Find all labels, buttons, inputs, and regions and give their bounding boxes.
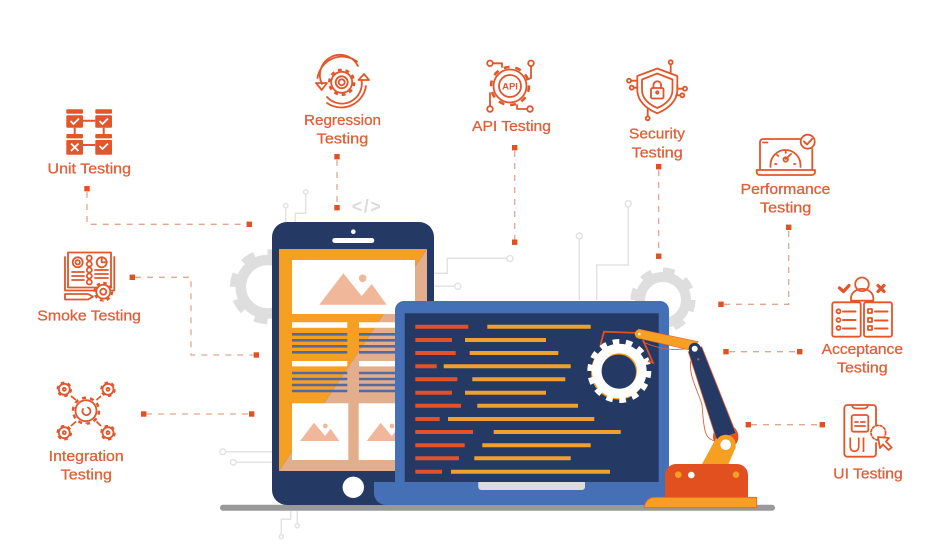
gear: white on laptop screen [590, 342, 648, 400]
code lines: orange [444, 327, 621, 472]
connector: regression testing [334, 154, 340, 210]
phone [272, 222, 434, 505]
icon: unit testing [66, 109, 112, 155]
connector: unit testing [84, 186, 252, 227]
icon: ui testing [844, 405, 892, 457]
gear: right gray [634, 270, 692, 330]
icon: integration testing [57, 382, 115, 440]
label: security testing: Security [629, 126, 686, 143]
icon: smoke testing [65, 252, 114, 301]
circuit lines background [220, 190, 631, 539]
laptop [374, 301, 669, 505]
ground bar [220, 505, 775, 511]
label: regression testing [304, 112, 381, 147]
label: integration testing [49, 448, 124, 483]
label: acceptance testing [822, 341, 903, 377]
connector: smoke testing [130, 275, 259, 358]
label: smoke testing: Smoke Testing [37, 308, 141, 325]
icon: security testing [627, 60, 687, 120]
connector: performance testing [718, 225, 791, 307]
connector: security testing [656, 164, 661, 259]
gear: left gray [233, 252, 302, 321]
connector: ui testing [746, 422, 825, 427]
icon: performance testing [757, 135, 815, 175]
icon: ui testing: UI [848, 434, 866, 457]
icon: code brackets: </> [352, 196, 382, 216]
robot arm [600, 329, 757, 508]
label: performance testing [741, 181, 830, 217]
label: ui testing: UI Testing [833, 466, 903, 483]
label: acceptance testing: Acceptance [822, 341, 903, 358]
icon: acceptance testing [832, 278, 892, 337]
label: acceptance testing: Testing [837, 360, 888, 377]
icon: api testing: API [502, 82, 518, 92]
label: regression testing: Testing [317, 130, 368, 147]
label: regression testing: Regression [304, 112, 381, 129]
label: api testing: API Testing [472, 118, 551, 135]
label: unit testing: Unit Testing [48, 160, 131, 177]
connector: api testing [512, 145, 517, 245]
label: integration testing: Integration [49, 448, 124, 465]
label: performance testing: Testing [760, 200, 811, 217]
icon: api testing [487, 60, 534, 112]
connector: acceptance testing [723, 349, 802, 354]
label: performance testing: Performance [741, 181, 830, 198]
label: integration testing: Testing [61, 466, 112, 483]
label: security testing [629, 126, 686, 161]
label: security testing: Testing [632, 144, 683, 161]
code lines: red [415, 327, 473, 472]
connector: integration testing [141, 411, 254, 417]
icon: regression testing [316, 55, 369, 107]
